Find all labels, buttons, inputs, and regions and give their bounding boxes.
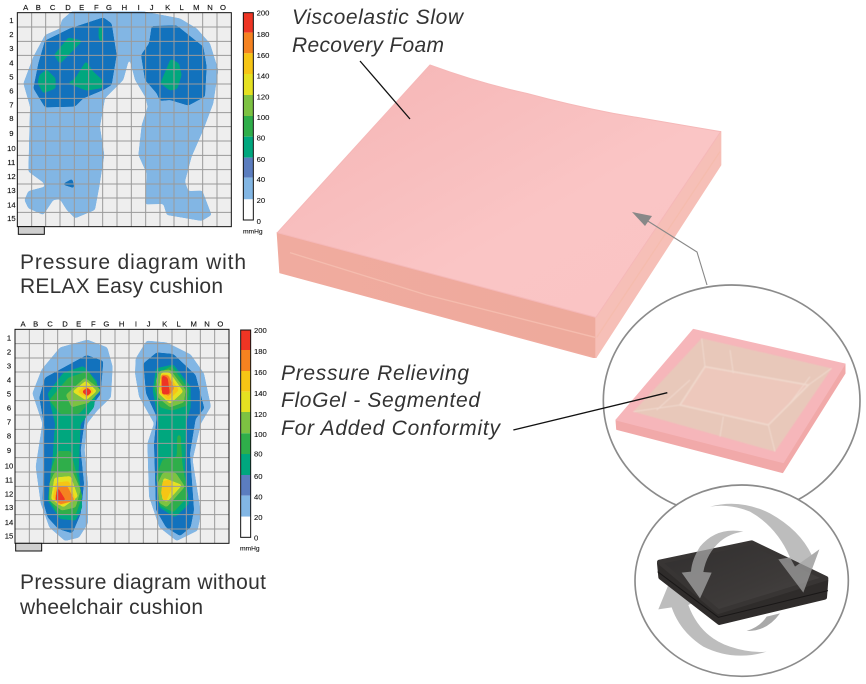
row labels: 13 (7, 186, 16, 195)
column labels: O (217, 320, 223, 329)
column labels: E (79, 3, 84, 12)
caption: with cushion (20, 251, 246, 298)
colour scale legend: 160 (257, 51, 269, 60)
colour scale legend: 20 (257, 196, 265, 205)
label: flogel: For Added Conformity (281, 417, 502, 440)
row labels: 3 (7, 361, 11, 370)
row labels: 10 (7, 144, 16, 153)
right foot pressure map (135, 341, 211, 541)
gel insert (633, 338, 832, 452)
column labels: B (33, 320, 38, 329)
column labels: N (204, 320, 210, 329)
row labels: 4 (7, 376, 12, 385)
colour scale legend: 40 (257, 175, 265, 184)
row labels: 4 (9, 58, 14, 67)
chart: pressure diagram with cushion (7, 3, 269, 235)
colour scale legend: 0 (257, 217, 261, 226)
black cushion (658, 543, 828, 623)
row labels: 7 (7, 417, 11, 426)
label: viscoelastic foam: Recovery Foam (292, 34, 444, 57)
column labels: H (122, 3, 127, 12)
colour scale legend: 60 (254, 472, 263, 481)
leader line: gel (513, 393, 667, 430)
gray arrow to foam (632, 212, 707, 285)
row labels: 9 (7, 446, 11, 455)
row labels: 5 (9, 72, 13, 81)
label: viscoelastic foam: Viscoelastic Slow (292, 6, 465, 29)
column labels: B (36, 3, 41, 12)
rotation arrow: upper outer back (710, 504, 819, 593)
column labels: A (20, 320, 26, 329)
colour scale legend (240, 326, 267, 553)
row labels: 2 (9, 30, 13, 39)
column labels: C (47, 320, 53, 329)
colour scale legend: mmHg (240, 546, 260, 553)
row labels: 12 (7, 172, 16, 181)
leader line: foam (360, 61, 410, 119)
column labels: C (50, 3, 56, 12)
row labels: 6 (9, 86, 13, 95)
caption: without cushion: Pressure diagram without (20, 571, 266, 594)
row labels: 10 (5, 461, 13, 470)
left foot pressure map (32, 340, 113, 541)
colour scale legend: 60 (257, 155, 265, 164)
colour scale legend: 40 (254, 492, 263, 501)
foam seam (290, 152, 720, 337)
caption: without cushion: wheelchair cushion (19, 596, 203, 619)
column labels: F (94, 3, 99, 12)
row labels: 9 (9, 129, 13, 138)
row labels: 8 (9, 114, 13, 123)
foam front side (277, 233, 596, 357)
column labels: L (180, 3, 184, 12)
detail circle: gel layer and cover (513, 285, 860, 516)
foam cushion (277, 65, 721, 357)
colour scale legend: 100 (257, 113, 269, 122)
column labels: J (150, 3, 154, 12)
row labels: 6 (7, 403, 11, 412)
circle outline (635, 485, 848, 676)
scale tab (16, 543, 42, 551)
row labels: 14 (5, 518, 14, 527)
column labels: I (135, 320, 137, 329)
colour scale legend: 200 (254, 326, 267, 335)
heatmap background (15, 329, 229, 543)
label: flogel: FloGel - Segmented (281, 389, 481, 412)
colour scale legend: 180 (257, 30, 269, 39)
column labels: K (162, 320, 168, 329)
caption: with cushion: Pressure diagram with (20, 251, 246, 274)
column labels: H (119, 320, 124, 329)
row labels: 15 (7, 214, 16, 223)
chart: pressure diagram without cushion (5, 320, 267, 553)
row labels (5, 333, 14, 540)
rotation arrow: upper inner (682, 531, 743, 598)
colour scale legend: 140 (257, 72, 269, 81)
column labels: F (91, 320, 96, 329)
rotation arrow: lower inner (747, 613, 780, 631)
gel cushion base (616, 329, 845, 473)
row labels: 11 (5, 475, 13, 484)
heatmap background (17, 13, 231, 227)
detail circle: black cover (635, 485, 848, 676)
row labels: 5 (7, 389, 11, 398)
pressure zones: medium (33, 17, 207, 188)
colour scale legend: 20 (254, 513, 263, 522)
row labels: 13 (5, 503, 13, 512)
gel detail outline (603, 285, 860, 516)
colour scale legend: 100 (254, 430, 267, 439)
column labels: O (220, 3, 226, 12)
row labels: 7 (9, 101, 13, 110)
column labels: K (165, 3, 171, 12)
scale tab (18, 227, 44, 234)
caption: without cushion (19, 571, 266, 619)
column labels: J (147, 320, 151, 329)
colour scale legend: 80 (254, 450, 263, 459)
label: viscoelastic foam (292, 6, 465, 57)
pressure zones: higher (38, 27, 182, 93)
row labels: 8 (7, 431, 11, 440)
colour scale legend: 120 (254, 410, 267, 419)
row labels (7, 16, 16, 223)
column labels (23, 3, 226, 12)
row labels: 11 (7, 158, 15, 167)
row labels: 12 (5, 489, 13, 498)
row labels: 1 (9, 16, 13, 25)
colour scale legend: 180 (254, 347, 267, 356)
colour scale legend (243, 9, 269, 235)
foam right side (596, 132, 721, 357)
caption: with cushion: RELAX Easy cushion (20, 275, 223, 298)
colour scale legend: 200 (257, 9, 269, 18)
column labels: M (193, 3, 200, 12)
column labels: A (23, 3, 29, 12)
column labels: G (103, 320, 109, 329)
colour scale legend: 160 (254, 368, 267, 377)
column labels: G (106, 3, 112, 12)
label: flogel (281, 362, 502, 440)
row labels: 14 (7, 201, 16, 210)
rotation arrow: lower outer (658, 585, 767, 656)
column labels: M (190, 320, 197, 329)
colour scale legend: 120 (257, 93, 269, 102)
row labels: 2 (7, 347, 11, 356)
row labels: 3 (9, 44, 13, 53)
label: flogel: Pressure Relieving (281, 362, 469, 385)
row labels: 15 (5, 531, 13, 540)
column labels (20, 320, 223, 329)
column labels: E (76, 320, 81, 329)
column labels: N (207, 3, 213, 12)
colour scale legend: 0 (254, 534, 258, 543)
foam top face (277, 65, 721, 317)
column labels: D (62, 320, 68, 329)
colour scale legend: 80 (257, 133, 265, 142)
column labels: I (138, 3, 140, 12)
column labels: L (177, 320, 181, 329)
rotation arrow: upper outer front (778, 549, 819, 593)
pressure zone: low pressure (23, 11, 218, 221)
column labels: D (65, 3, 71, 12)
row labels: 1 (7, 333, 11, 342)
colour scale legend: mmHg (243, 228, 263, 235)
colour scale legend: 140 (254, 389, 267, 398)
